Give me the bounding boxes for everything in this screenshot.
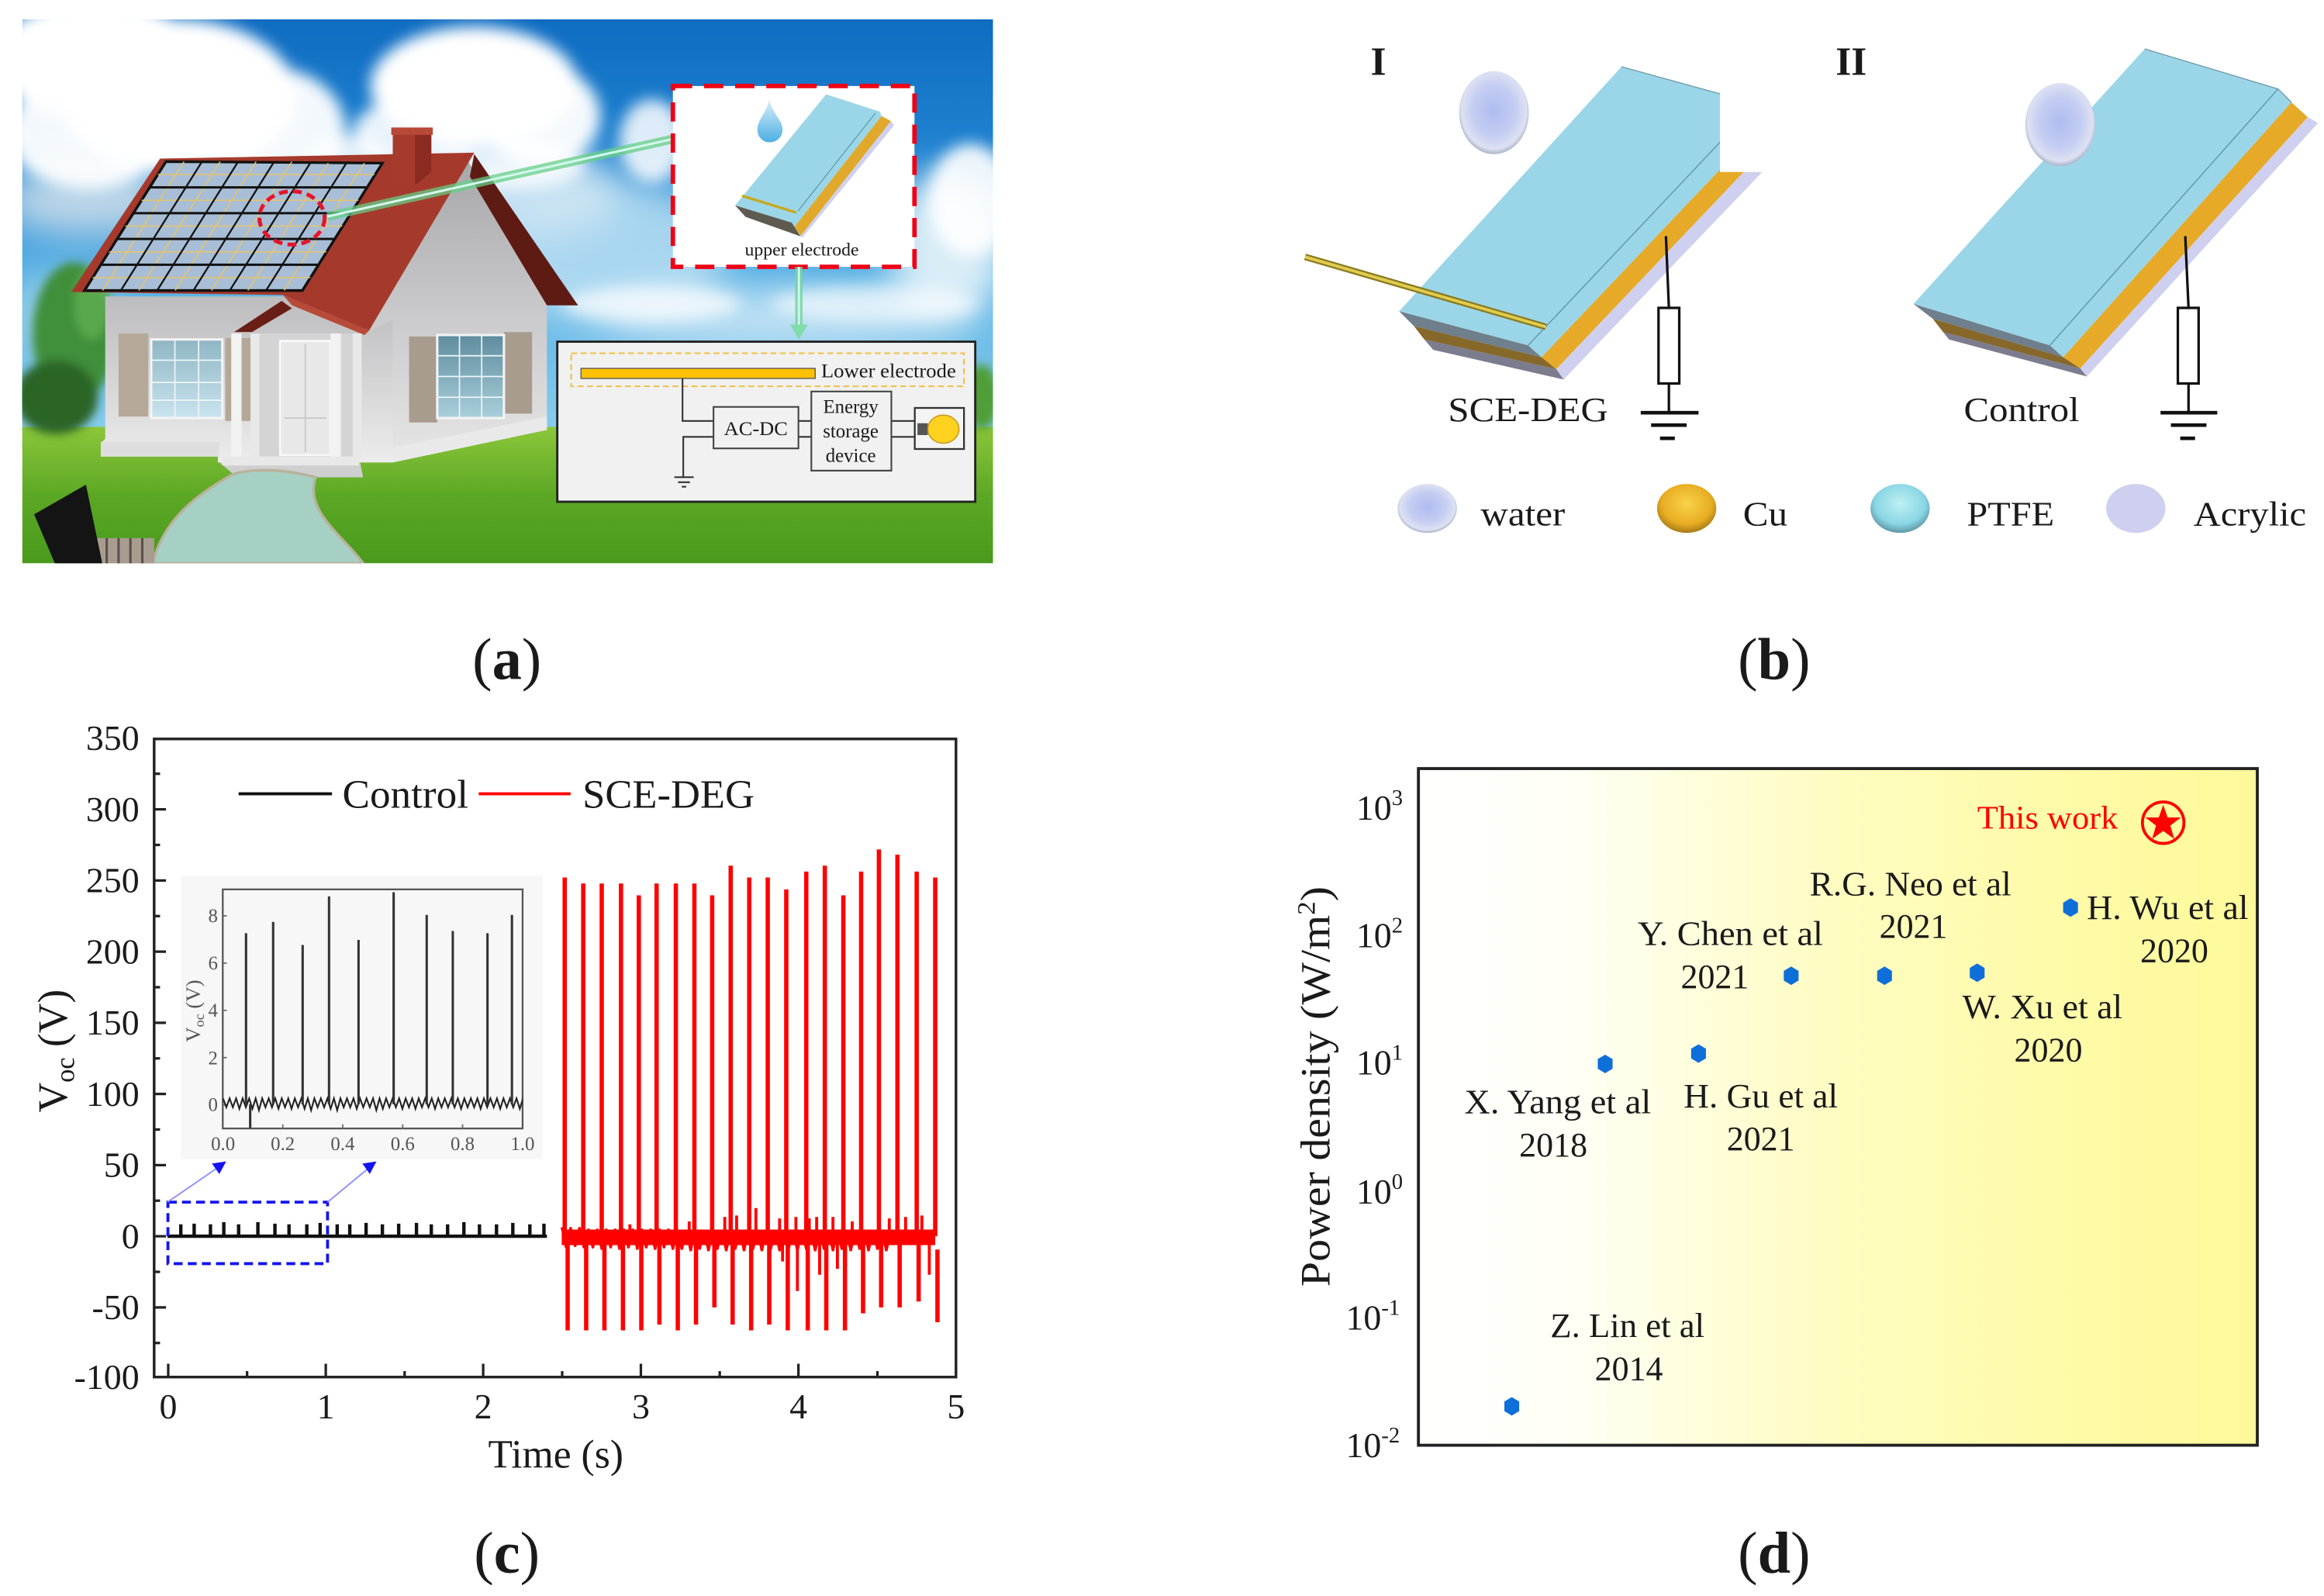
- heading I: I: [1371, 40, 1386, 85]
- data points: [1504, 898, 2078, 1415]
- porch and door: [223, 333, 361, 465]
- x tick labels: [159, 1387, 965, 1426]
- citation: Wu: 2020: [2140, 931, 2208, 969]
- water drop II: [2025, 83, 2095, 166]
- left window: [119, 333, 255, 421]
- y tick labels: 150: [86, 1003, 140, 1042]
- x tick labels: 2: [475, 1387, 492, 1426]
- series: control: [167, 1222, 547, 1236]
- AC-DC block: [713, 407, 799, 448]
- y tick labels: -2: [1381, 1423, 1400, 1448]
- label Control: Control: [1964, 391, 2080, 429]
- y tick labels: 10: [1356, 788, 1392, 827]
- citation labels: [1464, 865, 2249, 1387]
- energy storage block: [811, 392, 891, 471]
- load I: [1641, 237, 1698, 438]
- electrode rod: [1305, 257, 1546, 326]
- y axis title: 2: [1293, 901, 1321, 915]
- inset x labels: [211, 1134, 534, 1155]
- y tick labels: 1: [1392, 1041, 1403, 1066]
- legend: PTFE: PTFE: [1967, 496, 2054, 534]
- zoom arrows: [167, 1162, 376, 1202]
- citation: Neo: 2021: [1880, 907, 1948, 945]
- citation: Lin: 2014: [1595, 1349, 1663, 1387]
- plot frame and ticks: [154, 739, 956, 1377]
- caption (b): (b): [1738, 626, 1811, 692]
- citation: Chen: [1638, 915, 1823, 996]
- device II: [1914, 49, 2318, 438]
- water droplet: [758, 100, 782, 143]
- caption (c): (c): [474, 1520, 540, 1586]
- series: SCE-DEG: [561, 849, 938, 1330]
- y axis title: V: [29, 1083, 76, 1113]
- panel: device schematics (b): [1305, 40, 2318, 534]
- citation: Neo: [1810, 865, 2011, 945]
- down arrow: [790, 267, 808, 340]
- citation: Gu: H. Gu et al: [1683, 1077, 1838, 1115]
- citation: Neo: R.G. Neo et al: [1810, 865, 2011, 903]
- legend: Cu: [1657, 484, 1787, 534]
- x axis title: Time (s): [489, 1432, 623, 1477]
- inset x labels: 0.0: [211, 1134, 235, 1155]
- plot background: [1418, 769, 2257, 1446]
- garden path: [153, 470, 363, 563]
- house right wall: [361, 157, 547, 462]
- load II: [2160, 237, 2217, 438]
- clouds: [0, 0, 1012, 322]
- inset y labels: [209, 906, 219, 1116]
- inset ticks: [223, 916, 463, 1128]
- y tick labels: 10: [1356, 1172, 1392, 1211]
- y tick labels: 50: [104, 1145, 140, 1185]
- end face layers: [1399, 311, 1563, 379]
- inset y title: oc: [192, 1014, 207, 1027]
- end face layers: [1914, 304, 2087, 377]
- inset x labels: 1.0: [510, 1134, 534, 1155]
- y tick labels: [1346, 786, 1403, 1465]
- inset noise: [223, 1098, 530, 1111]
- label this work: This work: [1977, 800, 2119, 836]
- house front wall: [101, 296, 393, 462]
- energy storage block: device: [826, 445, 876, 466]
- y tick labels: -1: [1381, 1295, 1400, 1320]
- trees left: [15, 262, 999, 434]
- y axis title: oc: [51, 1057, 81, 1083]
- caption (a): (a): [472, 626, 541, 692]
- inset y title: (V): [181, 979, 205, 1014]
- inset y labels: 0: [209, 1095, 218, 1116]
- legend: [239, 773, 755, 817]
- lower electrode: Lower electrode: [821, 361, 956, 382]
- legend: water: [1397, 484, 1566, 534]
- circuit box: [558, 342, 976, 502]
- inset x labels: 0.6: [391, 1134, 415, 1155]
- citation: Yang: 2018: [1519, 1126, 1587, 1164]
- x tick labels: 1: [317, 1387, 335, 1426]
- legend: water: water: [1480, 496, 1566, 534]
- white patch: [1720, 44, 1839, 172]
- legend: Acrylic: [2106, 484, 2306, 534]
- inset y labels: 4: [209, 1000, 219, 1021]
- roof: [71, 153, 578, 335]
- y tick labels: 10: [1346, 1298, 1381, 1338]
- light bulb: [915, 408, 964, 449]
- x tick labels: 0: [159, 1387, 177, 1426]
- chimney: [392, 127, 433, 185]
- y tick labels: 100: [86, 1074, 140, 1114]
- citation: Yang: [1464, 1083, 1651, 1164]
- energy storage block: Energy: [823, 396, 879, 417]
- citation: Gu: 2021: [1727, 1120, 1795, 1158]
- label: upper electrode: upper electrode: [744, 240, 859, 260]
- panel: voltage chart (c): [29, 718, 965, 1477]
- y tick labels: 3: [1392, 786, 1403, 810]
- y tick labels: [74, 718, 140, 1397]
- citation: Wu: [2087, 889, 2249, 969]
- label SCE-DEG: SCE-DEG: [1448, 391, 1608, 429]
- energy storage block: storage: [823, 421, 879, 442]
- inset spikes: [246, 892, 512, 1128]
- y tick labels: 250: [86, 861, 140, 900]
- beam to upper electrode: [327, 140, 672, 216]
- inset x labels: 0.4: [330, 1134, 355, 1155]
- legend: Acrylic: Acrylic: [2194, 496, 2306, 534]
- small device: [735, 95, 894, 238]
- y tick labels: 0: [1392, 1169, 1403, 1194]
- heading II: II: [1835, 40, 1866, 85]
- citation: Chen: 2021: [1680, 958, 1749, 996]
- inset y labels: 2: [209, 1048, 218, 1069]
- inset x labels: 0.2: [271, 1134, 295, 1155]
- soft cloud haze: [0, 148, 1008, 363]
- y tick labels: 10: [1346, 1425, 1381, 1465]
- foundation: [101, 416, 547, 477]
- y tick labels: -100: [74, 1357, 140, 1397]
- sky: [22, 19, 993, 449]
- y tick labels: 0: [122, 1216, 140, 1256]
- citation: Lin: Z. Lin et al: [1550, 1307, 1704, 1345]
- citation: Xu: W. Xu et al: [1963, 988, 2122, 1026]
- x tick labels: 4: [789, 1387, 807, 1426]
- water drop I: [1459, 71, 1529, 154]
- upper electrode inset: [673, 86, 914, 267]
- citation: Chen: Y. Chen et al: [1638, 915, 1823, 953]
- citation: Gu: [1683, 1077, 1838, 1158]
- y tick labels: 350: [86, 718, 140, 758]
- citation: Xu: 2020: [2015, 1031, 2082, 1069]
- x tick labels: 5: [947, 1387, 965, 1426]
- x tick labels: 3: [632, 1387, 650, 1426]
- wires: [675, 378, 915, 487]
- y axis title: ): [1292, 886, 1338, 901]
- zoom selection box: [168, 1202, 327, 1263]
- panel: house scene (a): [0, 0, 1012, 563]
- y tick labels: 2: [1392, 913, 1403, 938]
- legend: Control: [343, 773, 468, 817]
- right window: [409, 332, 532, 423]
- y axis title: (V): [29, 990, 76, 1057]
- red dashed circle: [259, 192, 325, 244]
- solar panel: [85, 161, 382, 291]
- legend: Cu: Cu: [1743, 496, 1787, 534]
- device I: [1305, 44, 1839, 438]
- citation: Yang: X. Yang et al: [1464, 1083, 1651, 1121]
- citation: Lin: [1550, 1307, 1704, 1387]
- this work marker: [2143, 802, 2184, 844]
- caption (d): (d): [1738, 1520, 1811, 1586]
- inset y labels: 6: [209, 953, 218, 974]
- inset x labels: 0.8: [451, 1134, 475, 1155]
- y tick labels: 200: [86, 931, 140, 971]
- citation: Wu: H. Wu et al: [2087, 889, 2249, 927]
- laptop and bench: [34, 485, 154, 563]
- inset y title: V: [181, 1027, 205, 1042]
- legend: [1397, 484, 2306, 534]
- y tick labels: -50: [92, 1287, 140, 1327]
- lower electrode: [572, 353, 964, 386]
- inset y labels: 8: [209, 906, 218, 927]
- inset chart: [181, 876, 543, 1159]
- y tick labels: 10: [1356, 915, 1392, 955]
- y tick labels: 300: [86, 789, 140, 829]
- citation: Xu: [1963, 988, 2122, 1069]
- AC-DC block: AC-DC: [724, 417, 788, 440]
- legend: PTFE: [1870, 484, 2054, 534]
- panel: power density chart (d): [1292, 769, 2257, 1465]
- y tick labels: 10: [1356, 1043, 1392, 1083]
- y axis title: Power density (W/m: [1292, 943, 1338, 1287]
- grass: [22, 427, 993, 563]
- inset frame: [223, 890, 523, 1128]
- legend: SCE-DEG: [582, 773, 755, 817]
